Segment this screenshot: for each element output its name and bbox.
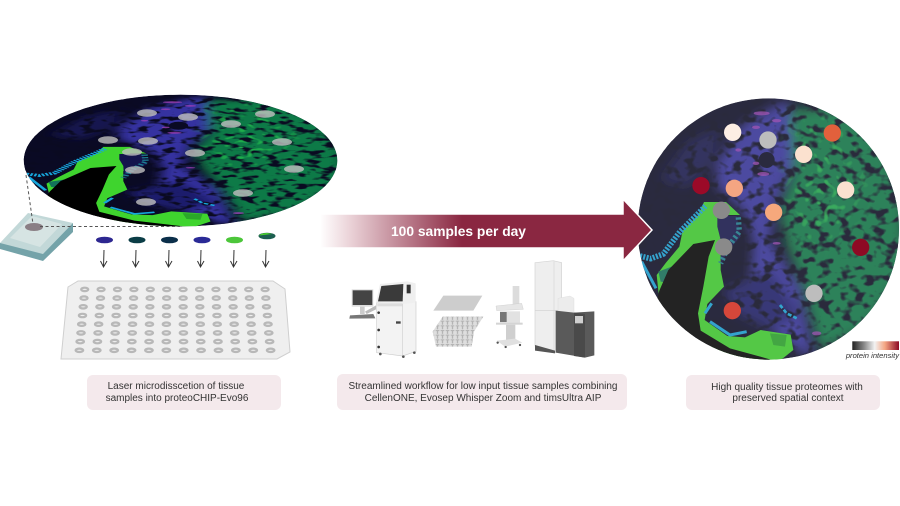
caption: tissue proteomes xyxy=(686,375,880,410)
caption: streamlined workflow: CellenONE, Evosep Whisper Zoom and timsUltra AIP xyxy=(365,393,602,404)
protein intensity legend xyxy=(845,341,900,360)
tissue on slide xyxy=(25,223,43,231)
chip and tip array xyxy=(433,296,483,347)
protein intensity legend: protein intensity xyxy=(845,351,900,360)
process arrow xyxy=(320,199,652,261)
caption: streamlined workflow: Streamlined workflow for low input tissue samples combining xyxy=(348,381,618,392)
proteoCHIP-Evo96 plate xyxy=(61,281,290,359)
microscope slide stage icon xyxy=(0,213,73,261)
caption: laser microdissection: samples into proteoCHIP-Evo96 xyxy=(106,393,249,404)
sample transfer arrows xyxy=(100,250,269,267)
dashed projection lines xyxy=(26,175,180,226)
caption: laser microdissection xyxy=(87,375,281,410)
instruments xyxy=(349,261,594,358)
caption: laser microdissection: Laser microdisscetion of tissue xyxy=(108,381,245,392)
tissue circle with protein intensity xyxy=(630,97,900,367)
arrow label: 100 samples per day xyxy=(391,224,526,239)
tissue ellipse with sampled regions xyxy=(14,94,346,230)
CellenONE instrument xyxy=(349,281,416,358)
dissected tissue samples xyxy=(96,233,276,243)
caption: streamlined workflow xyxy=(337,374,627,410)
caption: tissue proteomes: preserved spatial context xyxy=(732,393,844,404)
caption: tissue proteomes: High quality tissue proteomes with xyxy=(711,382,863,393)
laser dissection spots xyxy=(98,109,304,206)
tissue section in perspective xyxy=(14,94,346,230)
Evosep Whisper Zoom xyxy=(496,286,523,348)
timsUltra AIP mass spectrometer xyxy=(535,261,594,358)
protein intensity spots xyxy=(692,124,869,319)
tissue section xyxy=(630,97,900,367)
